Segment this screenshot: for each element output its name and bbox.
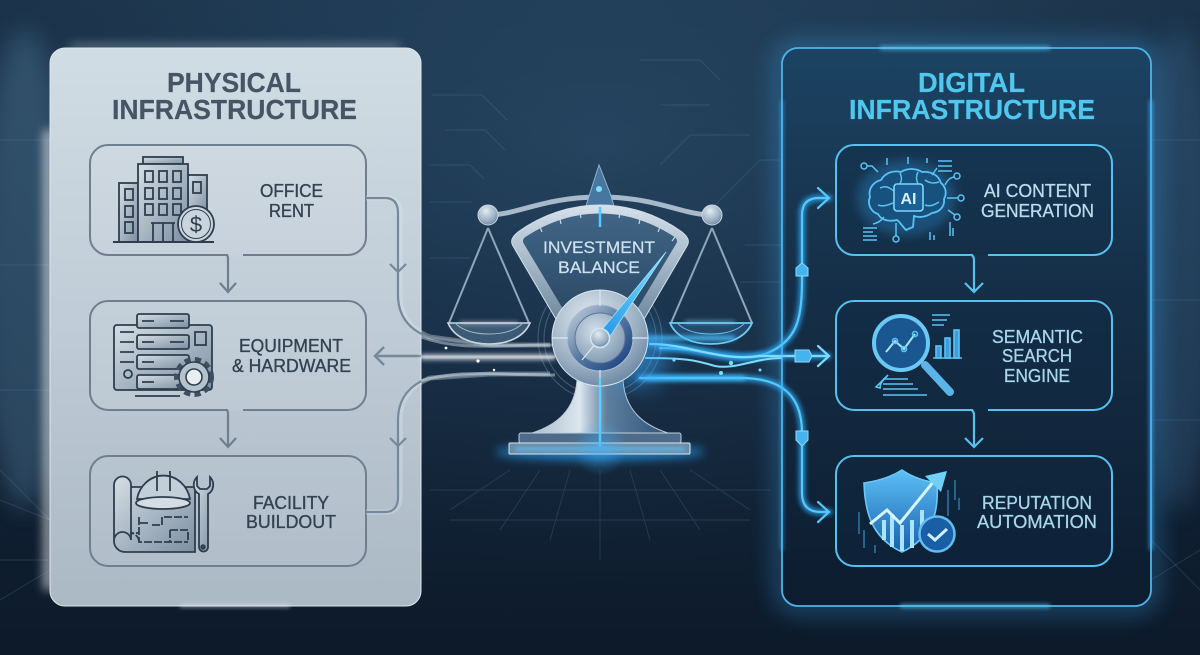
label: equipment and hardware [232, 336, 351, 376]
stand [509, 380, 690, 476]
label: semantic search engine: ENGINE [1004, 366, 1070, 386]
card: ai content generation [836, 145, 1112, 255]
arrows: physical costs flow lines [366, 198, 555, 512]
icon: shield with growth arrow and check [859, 470, 959, 553]
arrow: ai content to semantic search [965, 255, 983, 292]
label: reputation automation: AUTOMATION [977, 512, 1097, 532]
dial [552, 290, 666, 386]
icon: ai brain [858, 157, 964, 242]
icon: server rack with gear [114, 314, 212, 396]
card: reputation automation [836, 456, 1112, 566]
needle [590, 252, 666, 348]
gauge face [512, 205, 688, 326]
gauge label: investment balance: INVESTMENT [543, 238, 655, 257]
arrow: balance to ai content [660, 188, 829, 357]
arrow: balance to equipment and hardware [375, 347, 555, 365]
arrow: office rent to equipment [220, 255, 236, 292]
label: semantic search engine [992, 327, 1083, 386]
label: equipment and hardware: & HARDWARE [232, 356, 351, 376]
heading: digital infrastructure: INFRASTRUCTURE [849, 94, 1095, 125]
icon: office building with dollar coin [113, 157, 214, 242]
arrow: equipment to facility [220, 410, 236, 447]
arrow: balance to reputation [640, 378, 829, 522]
gauge label: investment balance [543, 238, 655, 277]
label: ai content generation [981, 181, 1094, 221]
card: semantic search engine [836, 301, 1112, 410]
heading: physical infrastructure: PHYSICAL [167, 67, 301, 98]
icon: magnifier with chart [874, 315, 962, 395]
label: office rent: RENT [269, 201, 314, 221]
glow accents on panel edges [180, 48, 1151, 606]
label: reputation automation: REPUTATION [982, 493, 1092, 513]
card: facility buildout [90, 456, 366, 566]
icon: blueprint, hard hat and wrench [114, 471, 213, 552]
heading: digital infrastructure: DIGITAL [918, 67, 1025, 98]
icon: office building with dollar coin: $ [190, 212, 202, 237]
label: facility buildout: FACILITY [253, 493, 329, 513]
balance scale: investment balance [421, 165, 782, 476]
arrow: facility buildout to balance [366, 374, 550, 512]
label: ai content generation: AI CONTENT [984, 181, 1091, 201]
gauge label: investment balance: BALANCE [558, 258, 640, 277]
label: semantic search engine: SEARCH [1002, 346, 1072, 366]
heading: digital infrastructure [849, 67, 1095, 125]
icon: left pan and strings [448, 228, 530, 344]
heading: physical infrastructure: INFRASTRUCTURE [112, 94, 357, 125]
arrow: semantic search to reputation [965, 410, 983, 447]
label: ai content generation: GENERATION [981, 201, 1094, 221]
icon: right pan and strings [670, 228, 752, 344]
label: office rent: OFFICE [260, 181, 323, 201]
beam [478, 165, 722, 225]
flow streams through dial [421, 337, 782, 381]
label: semantic search engine: SEMANTIC [992, 327, 1083, 347]
card: equipment and hardware [90, 301, 366, 410]
arrow: balance to semantic search [650, 344, 829, 366]
card: office rent [90, 145, 366, 255]
panel: digital infrastructure [782, 48, 1151, 606]
label: reputation automation [977, 493, 1097, 532]
panel: physical infrastructure [48, 47, 421, 606]
label: office rent [260, 181, 323, 221]
label: equipment and hardware: EQUIPMENT [239, 336, 343, 356]
heading: physical infrastructure [112, 67, 357, 125]
arrow: office rent to balance [366, 198, 550, 345]
label: facility buildout [246, 493, 336, 532]
label: facility buildout: BUILDOUT [246, 512, 336, 532]
icon: ai brain: AI [900, 191, 916, 208]
arrows: digital flow lines [640, 188, 829, 522]
